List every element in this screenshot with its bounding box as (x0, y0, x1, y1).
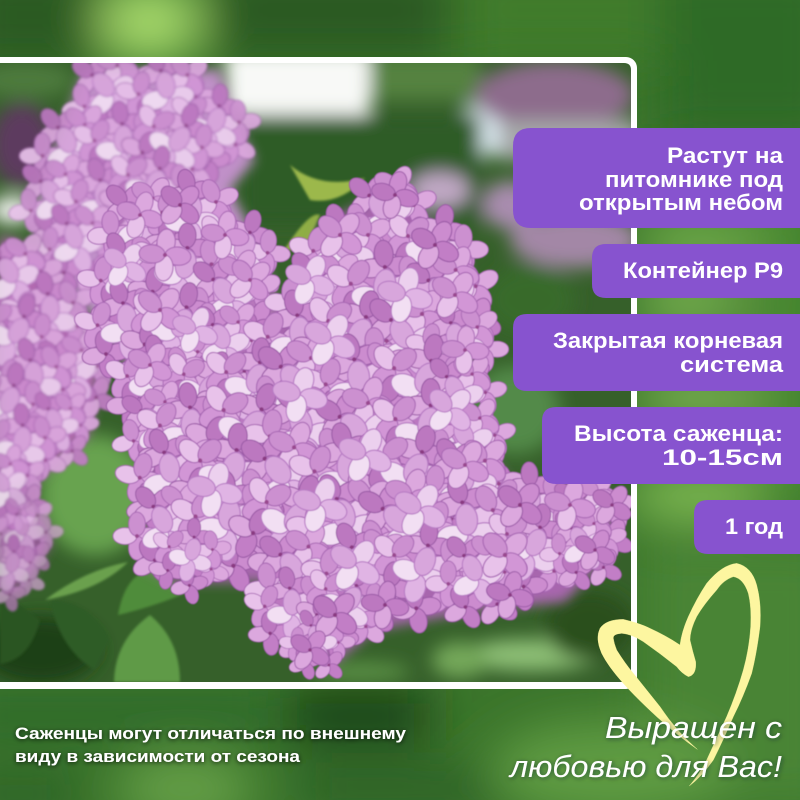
back clusters (0, 70, 618, 665)
callout: grown in the nursery: питомнике под (605, 167, 783, 192)
tagline: grown with love for you (508, 710, 783, 784)
callout: seedling height: 10-15см (662, 445, 783, 470)
callout: grown in the nursery (513, 128, 800, 228)
callout: grown in the nursery: Растут на (667, 143, 784, 168)
callout: closed root system: система (680, 352, 784, 377)
callout: container (592, 244, 800, 298)
callout: container: Контейнер Р9 (623, 258, 783, 283)
panel: photo frame (0, 57, 637, 689)
callout: age: 1 год (725, 514, 783, 539)
note: seedlings may differ by season (15, 724, 407, 766)
flowers: central cluster highlights (104, 185, 271, 388)
tagline: grown with love for you: Выращен с (605, 710, 783, 745)
flower clumps: main cluster (112, 165, 631, 680)
callout: seedling height (542, 407, 800, 484)
callout: age (694, 500, 800, 554)
flowers: main cluster highlights (181, 166, 643, 681)
note: seedlings may differ by season: виду в зависимости от сезона (15, 747, 301, 766)
leaves (0, 165, 365, 682)
tagline: grown with love for you: любовью для Вас! (508, 749, 782, 784)
callout: closed root system (513, 314, 800, 391)
callout: grown in the nursery: открытым небом (579, 190, 783, 215)
note: seedlings may differ by season: Саженцы могут отличаться по внешнему (15, 724, 407, 743)
callout: closed root system: Закрытая корневая (553, 328, 783, 353)
callout: seedling height: Высота саженца: (574, 421, 783, 446)
flower clumps: central cluster (74, 168, 292, 472)
icon: hand-drawn yellow heart (598, 563, 760, 786)
flower clumps: back top-left and left clusters (0, 63, 262, 613)
photo: lilac blossoms (0, 63, 631, 682)
